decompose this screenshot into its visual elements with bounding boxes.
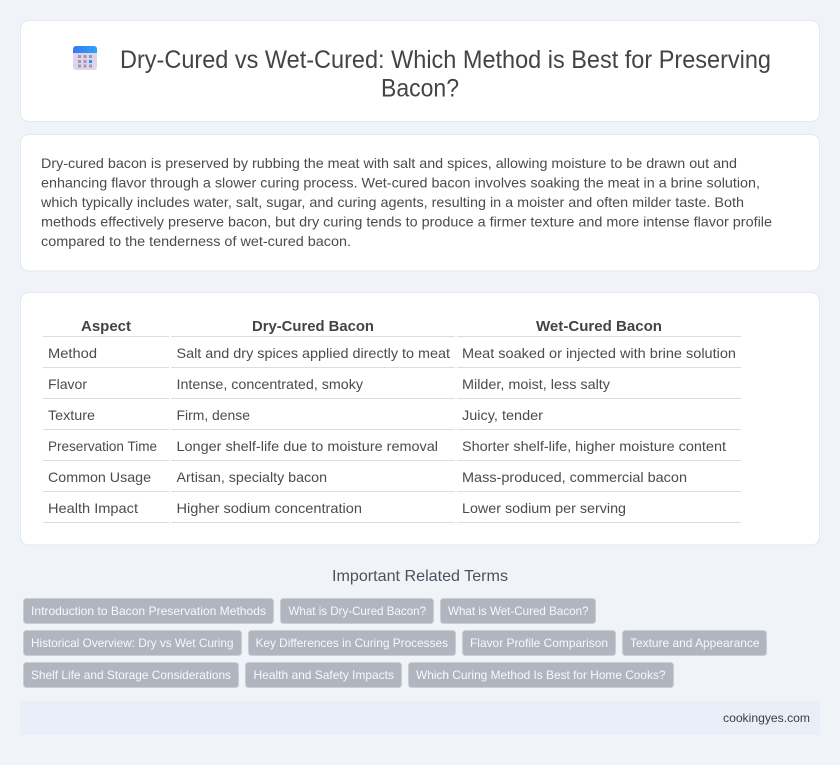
panel: intro paragraph [20,134,820,271]
row: method: Salt and dry spices applied directly to meat [176,345,450,361]
row: texture [48,407,543,423]
text block: intro: enhancing flavor through a slower curing process. Wet-cured bacon involves soaking the meat in a brine solution, [41,174,760,190]
related terms tags: What is Wet-Cured Bacon? [448,604,589,618]
related terms tags: What is Dry-Cured Bacon? [288,604,426,618]
row: health impact [48,500,626,516]
heading: related terms: Important Related Terms [332,568,508,585]
related terms tags: Shelf Life and Storage Considerations [31,668,231,682]
text block: intro [40,155,772,249]
related terms tags: Flavor Profile Comparison [470,636,608,650]
row: health impact: Higher sodium concentration [176,500,362,516]
title: Bacon? [381,74,459,102]
row: texture: Texture [48,407,95,423]
row: preservation time [48,438,726,454]
row: preservation time: Preservation Time [48,438,157,454]
text block: intro: which typically includes water, salt, sugar, and curing agents, resulting in a moister and often milder taste. Both [40,194,744,210]
related terms tags: Historical Overview: Dry vs Wet Curing [31,636,234,650]
row: health impact: Health Impact [48,500,138,516]
related terms tags: Key Differences in Curing Processes [256,636,448,650]
table header: Wet-Cured Bacon [536,318,662,335]
panel: title header [20,20,820,122]
title: Dry-Cured vs Wet-Cured: Which Method is Best for Preserving [120,46,771,74]
row: flavor: Milder, moist, less salty [462,376,610,392]
row: flavor [48,376,610,392]
text block: intro: compared to the tenderness of wet-cured bacon. [41,233,351,249]
related terms tags: Health and Safety Impacts [254,668,394,682]
title [120,46,771,102]
related terms tags: Texture and Appearance [630,636,760,650]
text block: intro: Dry-cured bacon is preserved by rubbing the meat with salt and spices, allowing moisture to be drawn out and [41,155,737,171]
row: flavor: Flavor [48,376,87,392]
row: texture: Firm, dense [176,407,250,423]
related terms tags: Introduction to Bacon Preservation Methods [31,604,266,618]
row: method: Meat soaked or injected with brine solution [462,345,736,361]
row: common usage: Artisan, specialty bacon [176,469,327,485]
table header [81,318,662,335]
icon: calendar [73,46,97,70]
row: texture: Juicy, tender [462,407,543,423]
table header: Aspect [81,318,131,335]
row: preservation time: Longer shelf-life due to moisture removal [176,438,438,454]
row: flavor: Intense, concentrated, smoky [176,376,363,392]
related terms tags [24,598,766,688]
footer [20,701,820,735]
row: preservation time: Shorter shelf-life, higher moisture content [462,438,726,454]
row: health impact: Lower sodium per serving [462,500,626,516]
text block: intro: methods effectively preserve bacon, but dry curing tends to produce a firmer texture and more intense flavor profile [41,214,772,230]
row: method: Method [48,345,97,361]
row: method [48,345,736,361]
row: common usage: Common Usage [48,469,151,485]
row: common usage [48,469,687,485]
row: common usage: Mass-produced, commercial bacon [462,469,687,485]
footer: cookingyes.com [723,711,810,725]
panel: comparison table [20,292,820,545]
table header: Dry-Cured Bacon [252,318,374,335]
related terms tags: Which Curing Method Is Best for Home Cooks? [416,668,666,682]
